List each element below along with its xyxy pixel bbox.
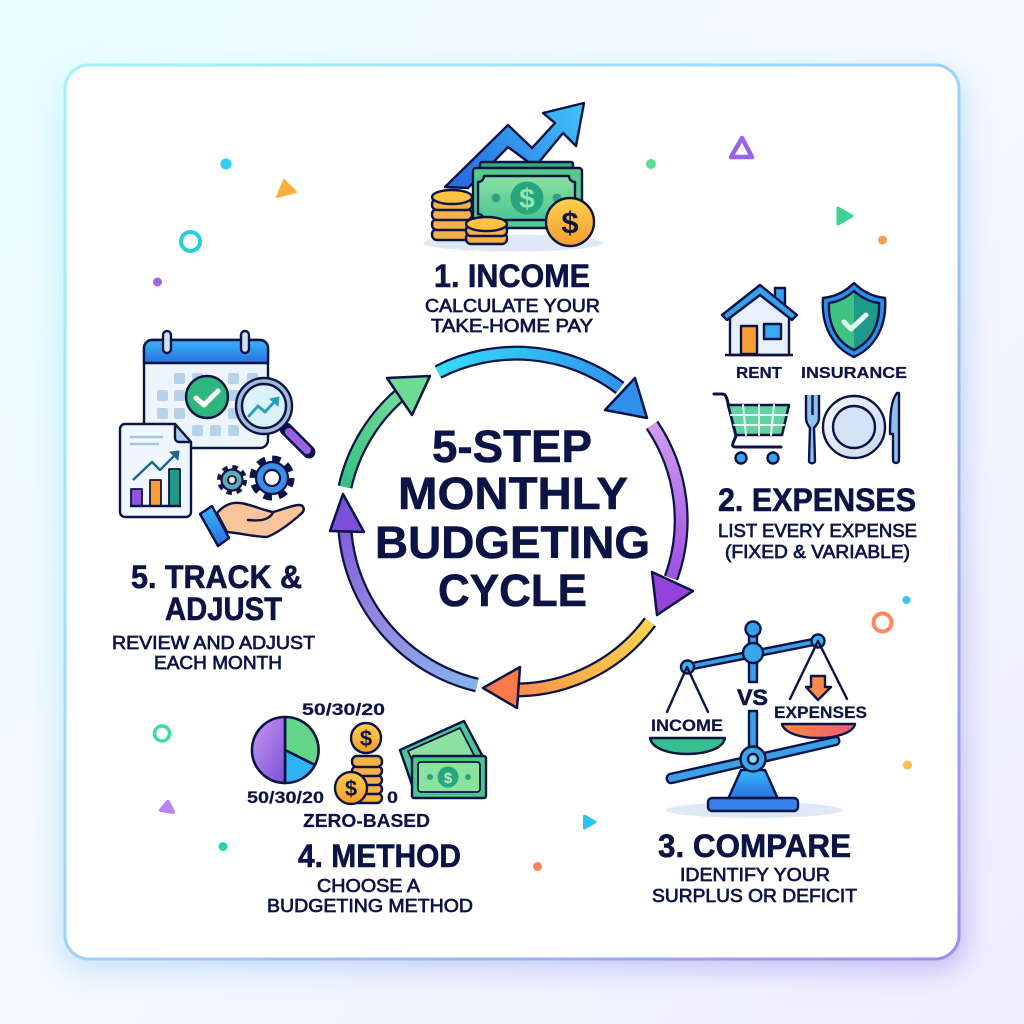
icon: insurance shield [823,283,885,357]
arrow: compare to method [483,622,650,708]
cycle arrows [330,353,693,708]
labels: budgeting methods: 0 [387,788,398,807]
center title: BUDGETING [375,517,650,568]
labels: budgeting methods: 50/30/20 [247,788,324,807]
icon: banknotes: $ [444,770,453,787]
card panel [65,65,959,959]
icon: coin stack: $ [360,726,372,751]
arrow: income to expenses [438,353,647,418]
icon: large gear [254,460,290,496]
icon: income rising arrow, cash and coins: $ [561,205,579,240]
heading: step 3 compare: SURPLUS OR DEFICIT [652,886,857,906]
labels: budgeting methods: ZERO-BASED [303,811,430,831]
arrow: track to income [345,376,430,487]
icon: pie chart [252,717,319,783]
heading: step 1 income: CALCULATE YOUR [425,296,600,316]
icon: magnifying glass with trend [236,378,309,452]
heading: step 4 method: 4. METHOD [298,838,461,874]
heading: step 4 method: CHOOSE A [317,876,420,896]
icon: balance scale income vs expenses [650,622,855,818]
icon: report document with bar chart [120,424,191,517]
labels: budgeting methods: 50/30/20 [302,700,385,719]
heading: step 5 track and adjust: REVIEW AND ADJUST [112,633,315,653]
center title: MONTHLY [398,468,628,519]
icon: house for rent [722,285,797,355]
icon: plate and cutlery [806,393,899,463]
icon: calendar with check [144,331,268,448]
label: rent: RENT [736,365,782,382]
label: vs: VS [737,685,768,710]
heading: step 5 track and adjust: ADJUST [165,591,282,627]
icon: coin stack [335,723,382,804]
center title: CYCLE [438,565,587,616]
heading: step 2 expenses: LIST EVERY EXPENSE [718,521,917,541]
icon: banknotes [400,721,486,798]
arrow: expenses to compare [652,425,693,615]
icon: small gear [220,468,244,492]
icon: shopping cart [714,394,789,464]
center title: 5-STEP [432,421,592,472]
icon: coin stack: $ [345,776,357,801]
heading: step 1 income: 1. INCOME [434,258,590,294]
center title [375,421,650,616]
heading: step 1 income [425,258,600,336]
card shadow [58,72,966,970]
icon: income rising arrow, cash and coins: $ [519,183,535,214]
heading: step 5 track and adjust: 5. TRACK & [131,559,302,595]
heading: step 3 compare: 3. COMPARE [658,828,851,864]
heading: step 3 compare [652,828,857,906]
heading: step 4 method: BUDGETING METHOD [267,896,473,916]
label: expenses pan: EXPENSES [774,704,867,722]
heading: step 4 method [267,838,473,916]
label: insurance: INSURANCE [801,365,907,382]
decorative confetti shapes [153,138,912,871]
heading: step 5 track and adjust: EACH MONTH [154,653,282,673]
icon: open hand [200,503,304,546]
heading: step 5 track and adjust [112,559,315,673]
heading: step 3 compare: IDENTIFY YOUR [680,865,830,885]
heading: step 1 income: TAKE-HOME PAY [431,316,593,336]
labels: budgeting methods [247,700,430,831]
label: income pan: INCOME [651,717,723,735]
arrow: method to track [330,494,477,685]
heading: step 2 expenses: 2. EXPENSES [718,482,916,518]
icon: income rising arrow, cash and coins [423,103,603,252]
heading: step 2 expenses: (FIXED & VARIABLE) [725,542,910,562]
heading: step 2 expenses [718,482,917,562]
